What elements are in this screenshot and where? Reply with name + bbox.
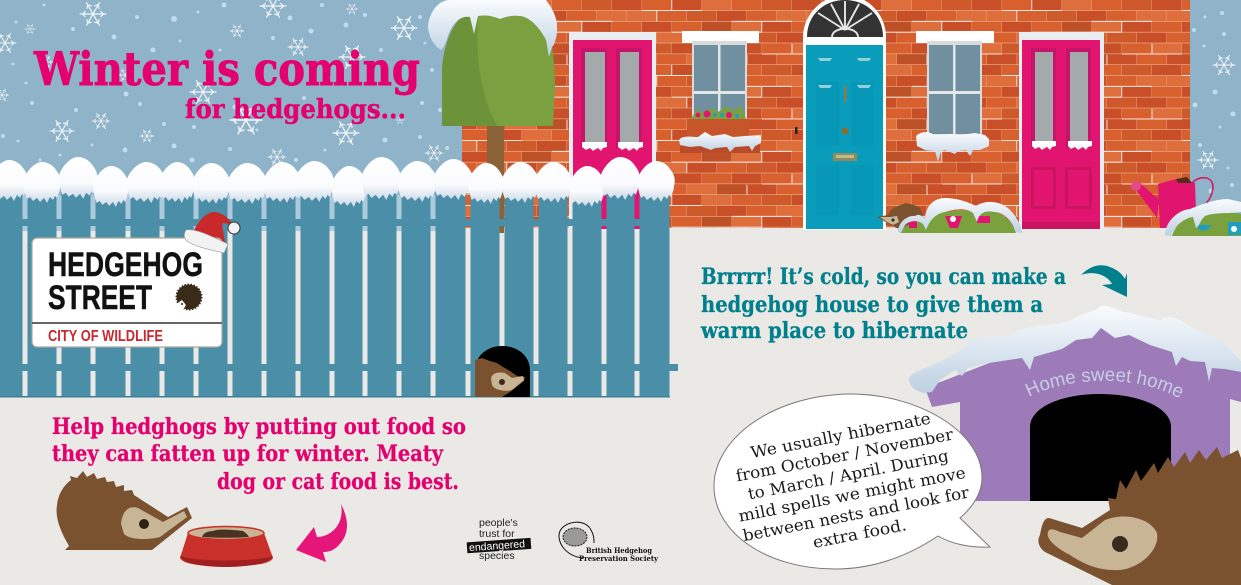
picket fence — [0, 157, 678, 398]
house advice text: Brrrrr! It’s cold, so you can make a — [701, 264, 1066, 290]
speech bubble — [714, 394, 990, 569]
food advice text: Help hedghogs by putting out food so — [52, 414, 466, 440]
food advice text — [52, 414, 466, 495]
sign heading: HEDGEHOG — [48, 246, 203, 284]
house sign — [1029, 381, 1182, 400]
santa hat — [184, 212, 240, 253]
teal arrow to house — [1081, 265, 1127, 297]
speech text: We usually hibernate — [749, 409, 932, 462]
logo: people's trust for endangered species: people's — [479, 517, 518, 529]
snow on sill — [916, 132, 989, 162]
snow on tree — [428, 0, 557, 57]
logo: people's trust for endangered species: endangered — [469, 538, 526, 554]
icon: hedgehog on sign — [175, 284, 202, 310]
title: Winter is coming — [33, 42, 420, 96]
food bowl — [180, 526, 273, 567]
brick wall — [462, 0, 1190, 228]
logo: British Hedgehog Preservation Society: Preservation Society — [579, 554, 659, 563]
blue front door — [795, 0, 886, 230]
small hedgehog by bushes — [877, 203, 923, 232]
large hedgehog — [1038, 447, 1241, 585]
speech text: extra food. — [811, 515, 908, 552]
speech text — [725, 404, 975, 565]
fence rails — [0, 219, 669, 226]
hedgehog with bowl — [57, 471, 192, 550]
hedgehog house: Home sweet home — [1025, 370, 1182, 397]
speech text: between nests and look for — [741, 483, 971, 545]
right window — [916, 31, 994, 162]
speech text: from October / November — [734, 425, 955, 485]
house advice text — [700, 264, 1066, 344]
hole in fence with hedgehog — [475, 346, 530, 397]
flower box — [691, 106, 746, 119]
speech text: to March / April. During — [746, 446, 950, 503]
door — [806, 45, 883, 229]
logo: people's trust for endangered species: species — [479, 550, 515, 562]
snow on sill — [679, 132, 761, 152]
tree crown — [442, 14, 555, 126]
pink arrow to bowl — [296, 504, 347, 562]
house body and roof — [925, 318, 1241, 501]
logo: people's trust for endangered species: trust for — [479, 528, 515, 540]
house advice text: hedgehog house to give them a — [701, 292, 1043, 318]
sign subheading: CITY OF WILDLIFE — [48, 328, 163, 345]
pale gaps behind the pickets — [22, 195, 436, 231]
snowflakes — [0, 0, 1235, 169]
subtitle: for hedgehogs... — [185, 95, 406, 125]
winter sky — [0, 0, 1241, 235]
right pink door — [1019, 32, 1104, 229]
logo: British Hedgehog Preservation Society — [559, 522, 659, 563]
door frame and fanlight — [803, 0, 886, 230]
logo: British Hedgehog Preservation Society: British Hedgehog — [586, 546, 653, 555]
tree trunk — [487, 120, 504, 233]
food advice text: dog or cat food is best. — [217, 469, 459, 495]
santa hat overlap band — [184, 230, 228, 253]
snowy bush right — [1165, 199, 1241, 236]
logo: people's trust for endangered species — [467, 517, 531, 562]
roof snow — [909, 306, 1241, 393]
house advice text: warm place to hibernate — [700, 318, 968, 344]
snow caps — [0, 157, 675, 207]
street sign: STREET — [48, 279, 152, 317]
watering can — [1131, 177, 1213, 228]
ground — [0, 228, 1241, 585]
house door — [1030, 394, 1171, 501]
speech text: mild spells we might move — [737, 463, 967, 526]
hedgehog house — [909, 306, 1241, 501]
street sign — [32, 238, 222, 347]
tree — [428, 0, 557, 233]
food advice text: they can fatten up for winter. Meaty — [52, 441, 444, 467]
left pink door — [569, 32, 656, 229]
left window with flower box — [679, 31, 761, 153]
title — [33, 42, 420, 125]
snowy bushes — [898, 198, 1022, 233]
